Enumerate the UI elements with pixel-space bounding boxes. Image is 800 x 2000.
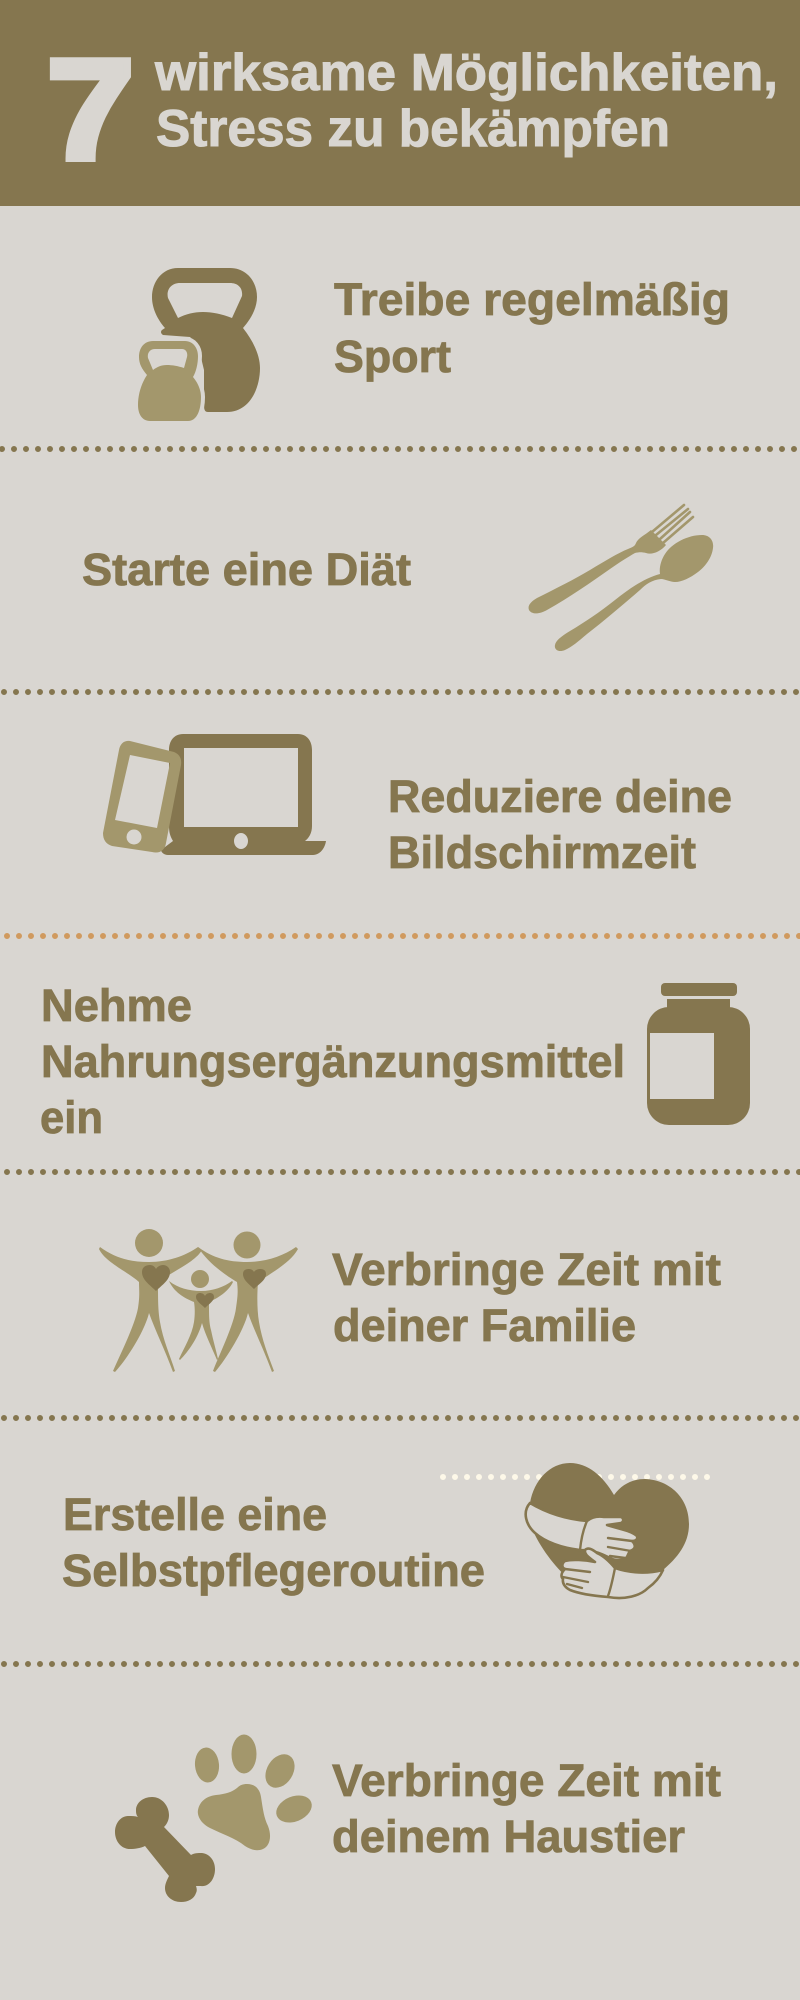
text: Verbringe Zeit mit deiner Familie xyxy=(332,1244,721,1351)
text: Verbringe Zeit mit deinem Haustier xyxy=(332,1755,721,1862)
text: Nehme Nahrungsergänzungsmittel ein xyxy=(40,980,625,1143)
icon: paw print xyxy=(194,1734,316,1850)
text: Treibe regelmäßig Sport: Sport xyxy=(334,331,451,382)
text: Erstelle eine Selbstpflegeroutine: Erstelle eine xyxy=(63,1489,327,1540)
text: Reduziere deine Bildschirmzeit xyxy=(388,771,732,878)
text: Verbringe Zeit mit deinem Haustier: deinem Haustier xyxy=(332,1811,685,1862)
icon: supplement jar xyxy=(647,983,750,1125)
text: Verbringe Zeit mit deinem Haustier: Verbringe Zeit mit xyxy=(332,1755,721,1806)
icon: fork and spoon xyxy=(529,505,713,651)
text: Erstelle eine Selbstpflegeroutine: Selbstpflegeroutine xyxy=(62,1545,485,1596)
icon: self-hug heart xyxy=(526,1463,689,1598)
big number 7: 7 xyxy=(47,30,134,190)
text: Treibe regelmäßig Sport xyxy=(334,274,730,382)
icon: tablet and phone xyxy=(103,734,326,855)
title: wirksame Möglichkeiten, xyxy=(154,44,778,102)
text: Verbringe Zeit mit deiner Familie: Verbringe Zeit mit xyxy=(332,1244,721,1295)
title xyxy=(154,44,778,158)
icon: bone xyxy=(115,1797,215,1902)
text: Starte eine Diät: Starte eine Diät xyxy=(82,544,411,595)
text: Nehme Nahrungsergänzungsmittel ein: Nahrungsergänzungsmittel xyxy=(41,1036,625,1087)
header banner xyxy=(0,0,800,206)
text: Treibe regelmäßig Sport: Treibe regelmäßig xyxy=(334,274,730,325)
icon: family xyxy=(99,1229,298,1372)
text: Nehme Nahrungsergänzungsmittel ein: ein xyxy=(40,1092,103,1143)
title: Stress zu bekämpfen xyxy=(156,100,670,158)
text: Erstelle eine Selbstpflegeroutine xyxy=(62,1489,485,1596)
text: Nehme Nahrungsergänzungsmittel ein: Nehme xyxy=(41,980,192,1031)
text: Verbringe Zeit mit deiner Familie: deiner Familie xyxy=(333,1300,636,1351)
text: Reduziere deine Bildschirmzeit: Reduziere deine xyxy=(388,771,732,822)
icon: kettlebells xyxy=(138,268,260,421)
text: Reduziere deine Bildschirmzeit: Bildschirmzeit xyxy=(388,827,696,878)
